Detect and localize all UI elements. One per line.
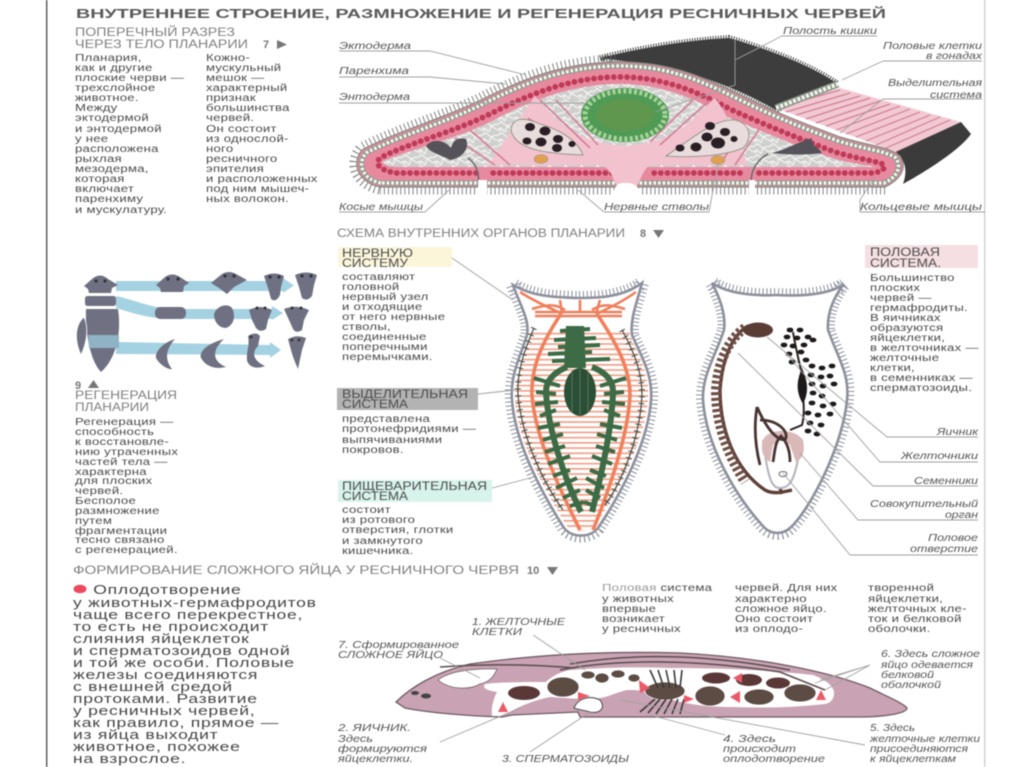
planaria: reproductive system [703,283,847,533]
panel: excretory system text: покровов. [342,443,404,456]
text block: egg column 1: Половая система [602,581,712,594]
labels and leaders of the longitudinal diagram [337,617,981,765]
panel: reproductive system text: сперматозоиды. [870,381,972,394]
labels and leaders of the longitudinal diagram: 6. Здесь сложное [881,649,981,660]
text block: regeneration: тесно связано [75,533,165,546]
text block: regeneration [75,380,178,556]
striped excretory back surface [776,88,961,152]
labels and leaders of the longitudinal diagram: яйцо одевается [880,660,974,671]
labels and leaders of the longitudinal diagram: 4. Здесь [723,734,776,745]
text block: planaria description, column 1: рыхлая [75,152,122,165]
copulatory organ [755,407,804,488]
panel: nervous system text: поперечными [342,340,428,353]
text block: planaria description, column 1: Между [75,101,118,114]
gut [534,326,626,512]
text block: egg column 1 [602,581,712,635]
text block: egg column 2: червей. Для них [735,581,837,594]
labels and leaders of the longitudinal diagram: желточные клетки [869,734,981,745]
text block: planaria description, column 1: Планария, [75,51,142,64]
text block: egg column 3: творенной [868,581,934,594]
panel: reproductive system text: Большинство [870,271,955,284]
left pore organ [426,138,479,186]
text block: planaria description, column 2: мускульный [206,61,281,74]
text block: regeneration: способность [75,425,154,438]
labels and leaders of the longitudinal diagram: Здесь [338,734,373,745]
text block: planaria description, column 2: большинства [206,101,290,114]
text block: planaria description, column 1: плоские черви — [75,71,184,84]
head frill [438,669,497,688]
labels and leaders of the longitudinal diagram: оболочкой [881,679,942,691]
panel: nervous system text: перемычками. [342,350,433,363]
cilia [512,283,651,536]
text block: egg column 1: у животных [602,592,674,605]
text block: planaria description, column 2: эпителия [206,162,264,175]
vitelline duct with glands [720,326,792,494]
labels and leaders of the cross-section: в гонадах [926,51,983,62]
labels and leaders of the planaria diagrams: Желточники [900,451,979,462]
text block: egg column 2: характерно [735,592,807,605]
text block: regeneration: размножение [75,504,160,517]
panel: excretory system text: ВЫДЕЛИТЕЛЬНАЯ [342,389,468,401]
labels and leaders of the cross-section: система [930,90,983,101]
text block: egg column 1: впервые [602,602,656,615]
eyes [411,691,419,695]
dark rear surface [896,122,971,184]
panel: excretory system text: СИСТЕМА [342,399,408,411]
labels and leaders of the longitudinal diagram: КЛЕТКИ [472,627,523,638]
panel: nervous system text: и отходящие [342,300,423,313]
panel: nervous system text: соединенные [342,330,427,343]
panel: reproductive system text [865,245,979,394]
panel: excretory system text [337,388,478,456]
text block: regeneration: нию утраченных [75,445,178,458]
row 3 fragments [76,309,306,372]
text block: fertilization: как правило, прямое — [73,716,279,730]
text block: fertilization: чаще всего перекрестное, [73,608,303,622]
text block: regeneration: червей. [75,484,123,497]
text block: planaria description, column 2: ресничного [206,152,278,165]
regeneration diagram [76,272,317,372]
egg cells [508,672,790,700]
labels and leaders of the cross-section [339,26,985,213]
panel: nervous system text: головной [342,280,400,293]
panel: reproductive system text: В яичниках [870,311,941,324]
panel: nervous system text: от него нервные [342,310,445,323]
labels and leaders of the cross-section: Эктодерма [339,41,412,52]
panel: reproductive system text: в семенниках — [870,371,973,384]
text block: regeneration: ПЛАНАРИИ [75,402,149,414]
text block: fertilization: из яйца выходит [73,728,218,742]
labels and leaders of the planaria diagrams: отверстие [910,544,979,555]
panel: excretory system text: выпячиваниями [342,433,442,446]
text block: planaria description, column 2: признак [206,91,256,104]
text block: egg column 2 [735,581,837,635]
panel: reproductive system text: ПОЛОВАЯ [870,247,940,259]
red arrows [498,673,826,712]
heading: cross-section: 7 [263,39,269,51]
longitudinal worm diagram [396,652,907,717]
labels and leaders of the cross-section: Косые мышцы [339,202,424,213]
text block: egg column 2: Оно состоит [735,612,814,625]
right pore organ [751,138,822,186]
transverse commissures [510,330,655,535]
planaria: nervous, excretory and digestive systems [510,283,655,536]
row 2 fragments [85,296,309,332]
text block: fertilization: железы соединяются [73,668,258,682]
text block: fertilization: у ресничных червей, [73,704,255,718]
text block: planaria description, column 2: червей. [206,111,254,124]
text block: regeneration: Бесполое [75,494,136,507]
text block: fertilization: и той же особи. Половые [73,656,295,670]
panel: nervous system text: составляют [342,270,416,283]
panel: digestive system text: из ротового [342,513,415,526]
heading: complex egg formation: 10 [527,565,539,577]
labels and leaders of the cross-section: Нервные стволы [604,202,710,213]
labels and leaders of the longitudinal diagram: присоединяются [870,744,969,755]
text block: planaria description, column 2 [206,51,318,205]
labels and leaders of the longitudinal diagram: оплодотворение [723,754,826,765]
text block: planaria description, column 2: ных волокон. [206,192,289,205]
labels and leaders of the longitudinal diagram: 7. Сформированное [338,639,460,651]
bottom notches [478,180,755,195]
central muscles [488,96,748,186]
panel: digestive system text: кишечника. [342,544,413,557]
labels and leaders of the longitudinal diagram: происходит [723,744,796,755]
top ectoderm edge of the ridge [776,84,838,108]
heading: complex egg formation [73,564,558,577]
text block: planaria description, column 2: характерный [206,81,288,94]
heading: cross-section [75,26,287,51]
panel: digestive system text: состоит [342,503,391,516]
text block: fertilization: слияния яйцеклеток [73,632,250,646]
text block: egg column 1: возникает [602,612,665,625]
text block: planaria description, column 1: которая [75,172,125,185]
panel: reproductive system text: образуются [870,321,943,334]
labels and leaders of the longitudinal diagram: к яйцеклеткам [870,754,956,765]
excretory canals [518,328,642,510]
labels and leaders of the longitudinal diagram: яйцеклетки. [337,754,413,765]
labels and leaders of the longitudinal diagram: белковой [881,669,935,681]
text block: planaria description, column 1: и энтодермой [75,122,162,135]
labels and leaders of the cross-section: Половые клетки [883,41,983,52]
heading: internal organs scheme: 8 [640,228,646,240]
parenchyma [383,84,875,167]
text block: planaria description, column 1: расположена [75,142,159,155]
panel: reproductive system text: в желточниках — [870,341,979,354]
cross-section diagram [357,38,971,195]
body [396,652,907,717]
text block: regeneration: 9 [75,380,81,392]
panel: reproductive system text: желточные [870,351,939,364]
text block: fertilization: протоками. Развитие [73,692,258,706]
yolk gland clusters [781,328,837,436]
text block: fertilization: то есть не происходит [73,620,269,634]
text block: regeneration: путем [75,514,112,527]
text block: egg column 1: у ресничных [602,622,681,635]
reproductive channel [484,667,834,716]
panel: digestive system text: и замкнутого [342,534,423,547]
text block: fertilization: Оплодотворение [93,583,241,597]
text block: planaria description, column 1: у нее [75,132,109,145]
text block: fertilization: на взрослое. [73,752,186,766]
gut cavity [581,88,669,142]
labels and leaders of the longitudinal diagram: 1. ЖЕЛТОЧНЫЕ [472,617,565,628]
labels and leaders of the planaria diagrams: Семенники [914,476,979,487]
text block: planaria description, column 2: мешок — [206,71,264,84]
labels and leaders of the planaria diagrams: Половое [928,533,979,544]
text block: fertilization: животное, похожее [73,740,241,754]
labels and leaders of the planaria diagrams: орган [945,510,979,521]
text block: regeneration: характерна [75,465,147,478]
text block: planaria description, column 2: Кожно- [206,51,250,64]
labels and leaders of the planaria diagrams: Яичник [936,427,980,438]
panel: nervous system text: стволы, [342,320,391,333]
text block: planaria description, column 2: и расположенных [206,172,318,185]
text block: egg column 2: сложное яйцо. [735,602,827,615]
text block: egg column 3: желточных кле- [868,602,967,615]
panel: digestive system text: отверстия, глотки [342,523,454,536]
nerve trunks [532,314,630,530]
text block: planaria description, column 2: Он состоит [206,122,277,135]
text block: regeneration: фрагментации [75,524,167,537]
text block: egg column 2: из оплодо- [735,622,803,635]
labels and leaders of the cross-section: Полость кишки [783,26,878,37]
panel: reproductive system text: яйцеклетки, [870,331,945,344]
panel: reproductive system text: гермафродиты. [870,301,968,314]
text block: fertilization: у животных-гермафродитов [73,596,317,610]
labels and leaders of the planaria diagrams: Совокупительный [870,499,979,510]
text block: planaria description, column 2: ного [206,142,234,155]
labels and leaders of the planaria diagrams [452,258,980,555]
text block: egg column 3 [868,581,967,635]
text block: egg column 3: ток и белковой [868,612,962,625]
heading: complex egg formation: ФОРМИРОВАНИЕ СЛОЖНОГО ЯЙЦА У РЕСНИЧНОГО ЧЕРВЯ [73,564,519,577]
labels and leaders of the cross-section: Кольцевые мышцы [860,202,983,213]
pink muscle band [367,70,894,179]
head nerves [520,292,636,316]
title: ВНУТРЕННЕЕ СТРОЕНИЕ, РАЗМНОЖЕНИЕ И РЕГЕНЕРАЦИЯ РЕСНИЧНЫХ ЧЕРВЕЙ [76,6,886,21]
labels and leaders of the cross-section: Паренхима [339,66,410,77]
panel: reproductive system text: червей — [870,291,932,304]
panel: excretory system text: протонефридиями — [342,422,476,435]
labels and leaders of the longitudinal diagram: 3. СПЕРМАТОЗОИДЫ [502,754,629,765]
text block: regeneration: РЕГЕНЕРАЦИЯ [75,390,177,402]
text block: fertilization: и сперматозоидов одной [73,644,290,658]
text block: planaria description, column 1: включает [75,182,134,195]
text block: regeneration: с регенерацией. [75,543,178,556]
panel: excretory system text: представлена [342,412,430,425]
text block: planaria description, column 1 [75,51,184,216]
text block: regeneration: частей тела — [75,455,168,468]
text block: planaria description, column 1: эктодермой [75,111,149,124]
fertilization comb [640,670,684,714]
text block: egg column 3: яйцеклетки, [868,592,943,605]
text block: planaria description, column 1: мезодерма, [75,162,149,175]
panel: digestive system text: СИСТЕМА [342,491,408,503]
text block: fertilization: с внешней средой [73,680,233,694]
text block: planaria description, column 1: трехслойное [75,81,156,94]
flow arrows [116,278,294,293]
cilia of the front face [357,62,885,187]
labels and leaders of the cross-section: Энтодерма [339,92,411,103]
nerve trunks [534,154,725,164]
text block: planaria description, column 2: под ним мышеч- [206,182,309,195]
panel: digestive system text [338,480,492,557]
panel: reproductive system text: клетки, [870,361,915,374]
panel: digestive system text: ПИЩЕВАРИТЕЛЬНАЯ [342,481,487,493]
cilia [703,283,847,533]
text block: egg column 3: оболочки. [868,622,931,635]
ovary [743,322,773,338]
labels and leaders of the cross-section: Выделительная [888,78,983,89]
labels and leaders of the longitudinal diagram: СЛОЖНОЕ ЯЙЦО [338,648,443,661]
right gonad [666,120,749,157]
sperm duct [574,698,602,712]
panel: nervous system text: нервный узел [342,290,429,303]
dark ciliated top surface [600,38,838,110]
text block: regeneration: Регенерация — [75,415,173,428]
text block: fertilization [73,583,317,766]
bullet [74,585,86,593]
panel: reproductive system text: плоских [870,281,920,294]
ectoderm cells [362,66,898,183]
text block: regeneration: для плоских [75,474,152,487]
text block: planaria description, column 1: как и другие [75,61,153,74]
text block: planaria description, column 1: паренхиму [75,192,143,205]
heading: cross-section: ПОПЕРЕЧНЫЙ РАЗРЕЗ [75,26,235,39]
dorsal ducts [440,657,825,690]
labels and leaders of the longitudinal diagram: формируются [338,743,428,755]
heading: internal organs scheme: СХЕМА ВНУТРЕННИХ ОРГАНОВ ПЛАНАРИИ [337,228,625,240]
panel: reproductive system text: СИСТЕМА. [870,258,941,270]
panel: nervous system text [338,247,452,363]
panel: nervous system text: НЕРВНУЮ [342,248,413,260]
labels and leaders of the longitudinal diagram: 2. ЯИЧНИК. [337,723,411,734]
row 1 heads [84,272,317,300]
labels and leaders of the longitudinal diagram: 5. Здесь [870,723,915,734]
text block: planaria description, column 1: и мускулатуру. [75,203,167,216]
text block: regeneration: к восстановле- [75,435,169,448]
body wall [357,62,903,187]
panel: nervous system text: СИСТЕМУ [342,258,409,270]
left gonad [511,119,583,155]
heading: cross-section: ЧЕРЕЗ ТЕЛО ПЛАНАРИИ [75,39,248,51]
text block: planaria description, column 1: животное. [75,91,139,104]
text block: planaria description, column 2: из однослой- [206,132,289,145]
red bead cells [378,77,884,173]
